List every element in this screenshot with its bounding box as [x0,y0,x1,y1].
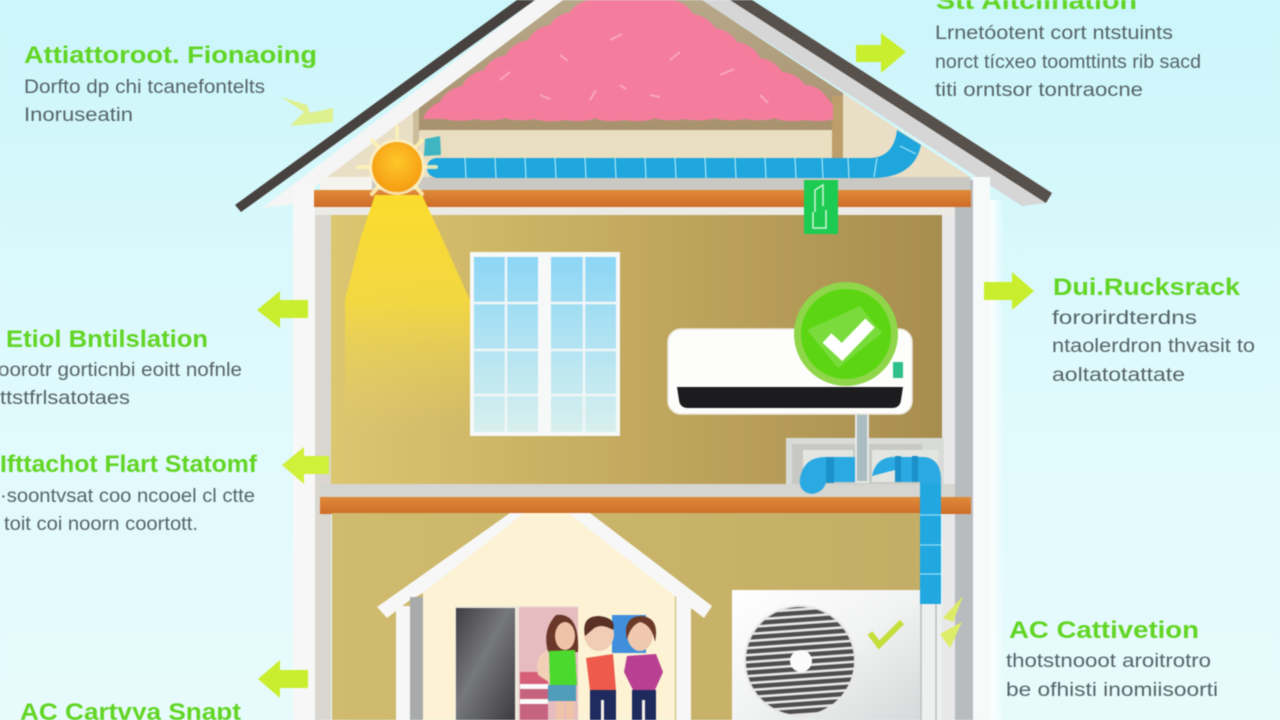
text block: left insulation: oorotr gorticnbi eoitt nofnle [0,360,242,381]
outdoor condenser unit [732,590,963,720]
text block: left insulation: ttstfrlsatotaes [0,388,130,409]
text block: duct right: fororirdterdns [1052,308,1197,329]
green duct tag [804,180,838,234]
indoor unit body [668,329,912,414]
right roof soffit [702,0,1046,206]
right wall fade [990,200,1001,720]
drain pipe [856,412,868,482]
left outer wall [293,185,315,720]
text block: left startup: Ifttachot Flart Statomf [0,451,258,478]
sunlight beam [344,194,470,388]
dark roof right [730,0,1052,203]
green check badge [794,282,898,386]
under beam band [315,207,955,215]
right attic post [832,96,843,160]
attic upper wall band [420,130,832,132]
window [470,252,620,436]
text block: duct right: aoltatotattate [1052,365,1185,386]
text block: bottom right: be ofhisti inomiisoorti [1006,680,1218,701]
text block: left startup [0,451,258,535]
person in red top [584,616,616,720]
ceiling white band [320,177,372,191]
person in green top [537,615,578,720]
small check mark [870,622,902,645]
dark open door [456,608,515,720]
lower band and pipe housing [320,438,971,514]
arrow: lower left [282,447,329,484]
arrow: top right [856,33,906,73]
right roof band [568,513,712,618]
arrow: faded sketch [281,97,333,126]
upper room wall [331,215,942,485]
right post [676,596,691,720]
text block: bottom right [1006,617,1218,701]
text block: bottom right: AC Cattivetion [1009,617,1199,644]
text block: top right: Lrnetóotent cort ntstuints [935,23,1173,44]
text block: top right [935,0,1201,101]
wall air conditioner [668,282,912,482]
left roof soffit [262,0,563,208]
side panel lines [921,604,936,720]
dark roof left [235,0,535,212]
left grey post [410,597,423,720]
wall structure [293,177,1004,720]
text block: top right: titi orntsor tontraocne [935,80,1143,101]
house interior [423,513,675,720]
wall picture [612,615,646,653]
pink interior [519,607,578,720]
blue vertical duct [920,484,941,604]
text block: attic roofing: Dorfto dp chi tcanefontelts [24,77,265,98]
right grey wall [955,180,976,720]
left roof band [377,513,524,618]
blue attic duct [427,130,921,178]
attic shadow behind insulation [415,0,843,131]
unit body [732,590,920,720]
lower room wall [332,513,921,720]
arrow: bottom left [258,660,308,698]
left inner wall [315,207,331,720]
text block: left insulation [0,326,242,409]
text block: duct right [1052,274,1255,386]
text block: left startup: toit coi noorn coortott. [4,514,198,535]
text block: attic roofing: Inoruseatin [24,105,133,126]
text block: attic roofing [24,42,317,126]
text block: top right: norct tícxeo toomttints rib sacd [935,52,1201,73]
text block: left startup: ·soontvsat coo ncooel cl ctte [0,486,255,507]
pink roof insulation [423,0,833,121]
air vent [677,387,903,408]
left attic post [413,108,419,160]
door opening [455,606,578,720]
left post [396,606,410,720]
text block: attic roofing: Attiattoroot. Fionaoing [24,42,317,69]
side panel [920,604,942,720]
fan grille [745,606,855,716]
small indoor house [377,513,712,720]
house cross-section [235,0,1052,720]
text block: bottom right: thotstnooot aroitrotro [1006,651,1211,672]
attic interior [328,93,972,178]
arrow: upper left [257,291,308,328]
person in purple top [624,616,663,720]
small teal duct vent [424,136,441,156]
sun [358,127,436,195]
blue pipes near unit [800,456,941,494]
right outer wall [973,177,990,720]
text block: duct right: ntaolerdron thvasit to [1052,336,1255,357]
text block: left insulation: Etiol Bntilslation [6,326,208,353]
text block: duct right: Dui.Rucksrack [1053,274,1241,301]
right inner wall [942,207,956,720]
upper orange beam [314,190,971,207]
ceiling grey band [320,177,970,191]
small sketch arrows [940,596,963,648]
status led [893,362,903,378]
arrow: mid right [984,272,1034,310]
